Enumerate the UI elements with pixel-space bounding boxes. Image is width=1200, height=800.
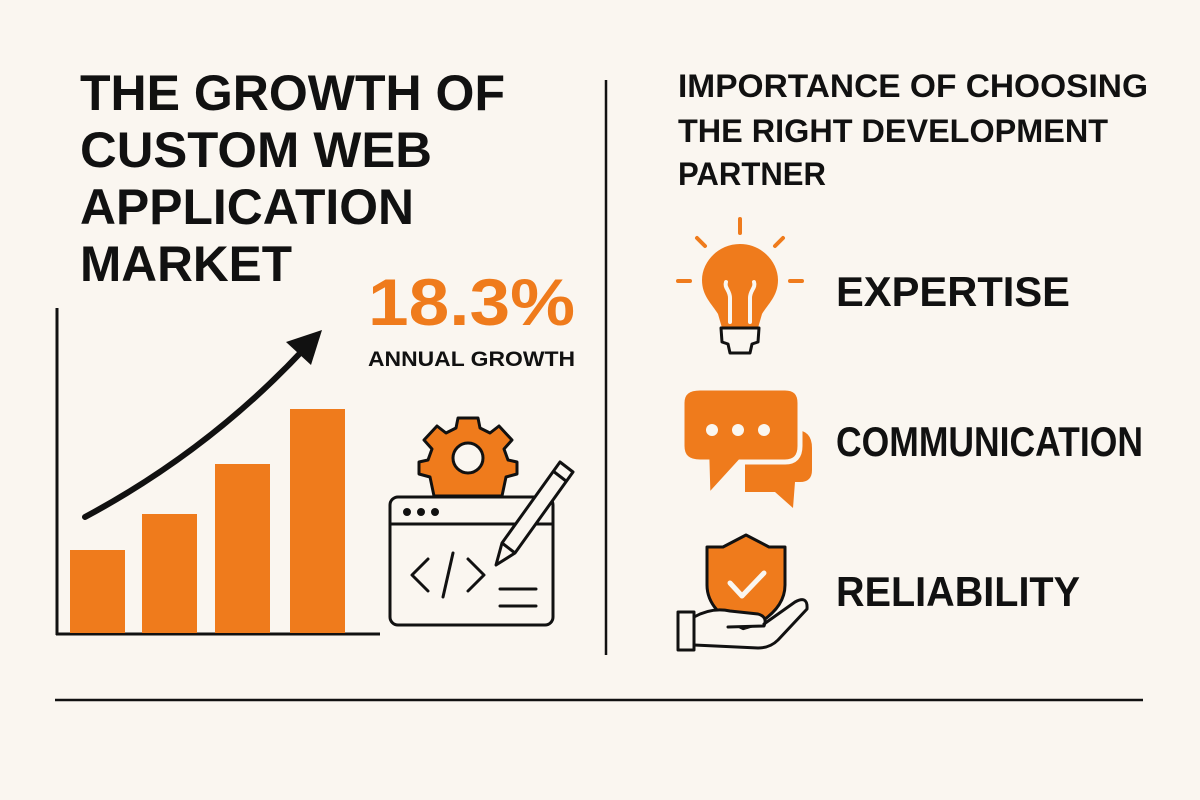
icon: chat bubbles	[682, 388, 812, 508]
icon: shield in hand	[678, 535, 807, 650]
icon: gear, code window, pencil	[390, 418, 573, 625]
stat: 18.3%: ANNUAL GROWTH	[368, 348, 575, 371]
text: reliability: RELIABILITY	[836, 568, 1080, 615]
right heading: THE RIGHT DEVELOPMENT	[678, 113, 1108, 149]
stat: 18.3%: 18.3%	[368, 265, 575, 339]
right heading	[678, 68, 1148, 192]
title: CUSTOM WEB	[80, 122, 432, 178]
text: communication: COMMUNICATION	[836, 418, 1143, 465]
right heading: IMPORTANCE OF CHOOSING	[678, 68, 1148, 104]
title: MARKET	[80, 236, 292, 292]
stat: 18.3%	[368, 265, 575, 371]
arrow: growth	[85, 330, 322, 517]
text: expertise: EXPERTISE	[836, 268, 1070, 315]
bar chart	[56, 308, 380, 635]
icon: light bulb	[678, 219, 802, 353]
title	[80, 65, 505, 292]
title: APPLICATION	[80, 179, 414, 235]
title: THE GROWTH OF	[80, 65, 505, 121]
divider vertical	[605, 80, 607, 655]
right heading: PARTNER	[678, 156, 826, 192]
